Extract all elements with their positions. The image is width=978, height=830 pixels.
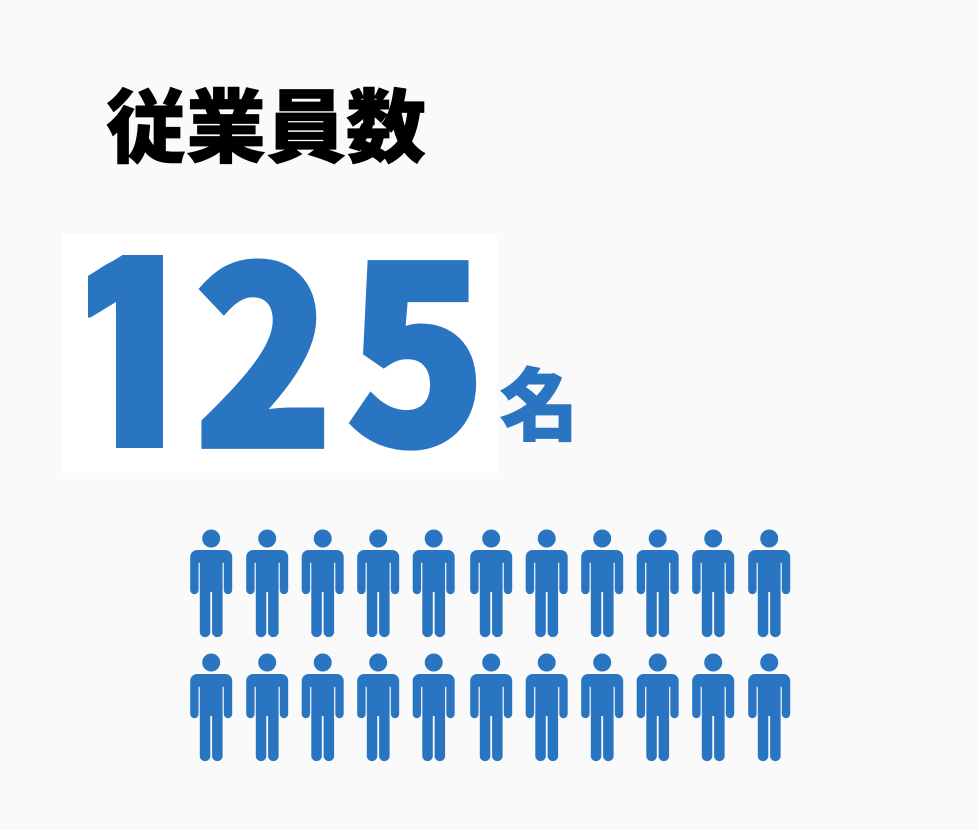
- people row 1: [190, 530, 790, 637]
- number: 125: [88, 255, 476, 451]
- unit: 名: 名: [500, 362, 578, 451]
- number: 125: 2: [194, 164, 334, 518]
- white number panel: [62, 234, 497, 473]
- number: 125: 5: [346, 163, 486, 516]
- people row 2: [190, 654, 790, 761]
- number: 125: 1: [44, 124, 220, 587]
- title: 従業員数: [106, 84, 426, 173]
